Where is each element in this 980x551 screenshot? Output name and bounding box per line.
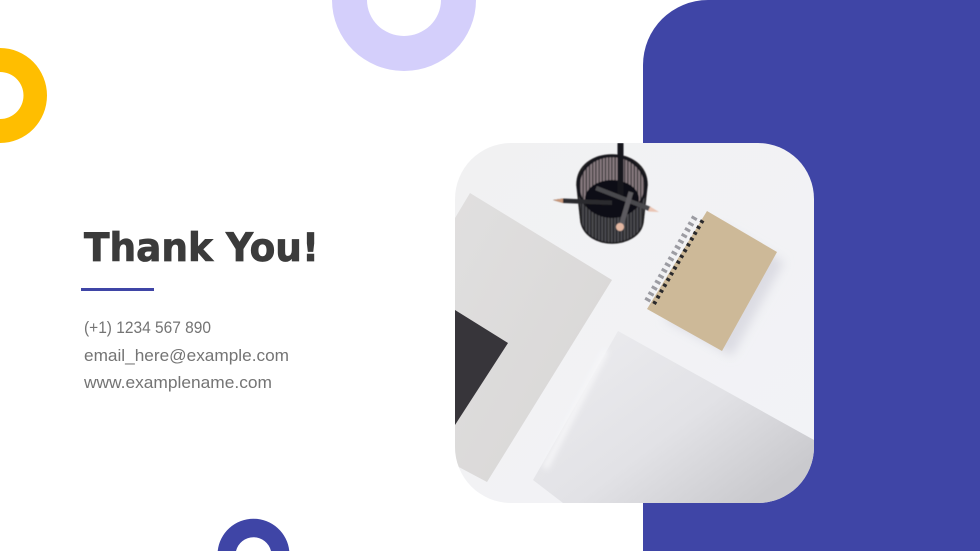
contact details (83, 318, 289, 392)
blue background panel (643, 0, 980, 551)
closed laptop (533, 331, 814, 503)
black insert (455, 310, 508, 425)
pencil tip left (553, 198, 563, 203)
email address: email_here@example.com (84, 346, 289, 365)
paper folder (455, 193, 612, 482)
short pencil (621, 192, 631, 226)
wire spiral (647, 215, 704, 304)
yellow ring decoration (0, 48, 47, 143)
holder rim (578, 156, 646, 216)
desk photo (455, 143, 814, 503)
notebook shadow (668, 256, 782, 354)
lavender ring decoration (332, 0, 476, 71)
horizontal pencil (553, 198, 612, 205)
blue ring decoration (218, 519, 289, 551)
website: www.examplename.com (83, 373, 272, 392)
spiral notebook (647, 211, 777, 351)
holder body (577, 155, 647, 243)
phone number: (+1) 1234 567 890 (84, 318, 211, 337)
heading underline (81, 288, 154, 291)
desk surface (455, 143, 814, 503)
upright pencil (618, 143, 624, 195)
kraft cover (647, 211, 777, 351)
holder contents (585, 180, 639, 218)
pencil tip right (648, 206, 659, 212)
laptop bright edge (545, 350, 606, 468)
pencil eraser (616, 223, 624, 231)
heading: Thank You!: Thank You! (84, 226, 319, 271)
diagonal pencil (596, 188, 650, 209)
pen holder (553, 143, 659, 243)
